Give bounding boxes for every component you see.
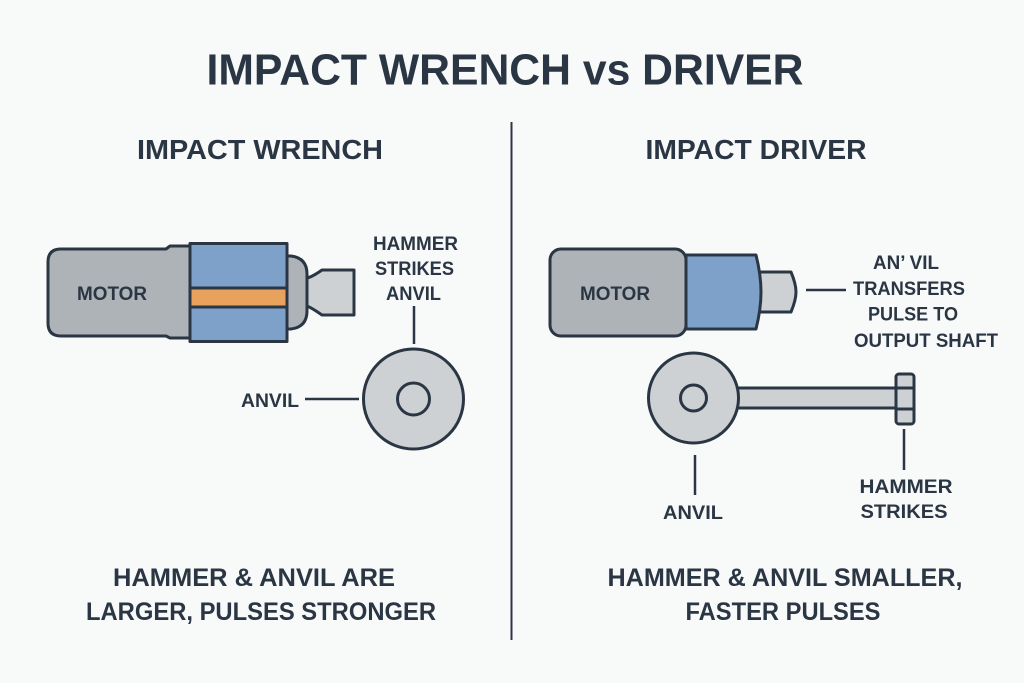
driver label: hammer strikes: HAMMER	[860, 477, 953, 498]
leader line: driver anvil	[806, 289, 846, 291]
wrench motor housing	[48, 246, 190, 338]
driver tool diagram	[550, 249, 796, 336]
wrench anvil disc	[364, 349, 464, 449]
wrench caption	[86, 564, 436, 626]
driver caption	[608, 564, 962, 626]
wrench orange band	[190, 288, 287, 307]
leader line: driver anvil bottom	[694, 455, 696, 495]
shaft nut	[896, 374, 914, 424]
driver motor	[550, 249, 686, 336]
driver motor label: MOTOR	[580, 284, 650, 305]
wrench label: hammer strikes anvil: HAMMER	[373, 234, 458, 255]
title: IMPACT WRENCH vs DRIVER	[206, 46, 804, 94]
wrench motor label: MOTOR	[77, 284, 147, 305]
driver label: anvil transfers pulse: TRANSFERS	[853, 279, 965, 300]
wrench label: hammer strikes anvil: STRIKES	[375, 259, 454, 280]
heading: impact wrench: IMPACT WRENCH	[137, 134, 383, 165]
wrench tip	[307, 270, 354, 315]
driver label: anvil transfers pulse: PULSE TO	[868, 304, 958, 326]
wrench anvil label: ANVIL	[241, 391, 299, 412]
wrench hammer block	[190, 244, 287, 342]
driver blue body	[686, 255, 761, 329]
driver shaft and anvil	[648, 353, 914, 443]
driver caption: FASTER PULSES	[686, 598, 880, 626]
driver label: anvil transfers pulse	[853, 253, 998, 352]
shaft	[735, 388, 899, 408]
driver anvil disc	[648, 353, 738, 443]
driver tip	[759, 272, 796, 312]
driver label: anvil transfers pulse: AN’ VIL	[873, 253, 939, 274]
center divider	[510, 122, 512, 640]
driver label: hammer strikes	[860, 477, 953, 523]
wrench label: hammer strikes anvil: ANVIL	[386, 284, 441, 305]
wrench tool diagram	[48, 244, 354, 342]
heading: impact driver: IMPACT DRIVER	[646, 134, 866, 165]
driver label: anvil transfers pulse: OUTPUT SHAFT	[854, 331, 998, 352]
wrench caption: HAMMER & ANVIL ARE	[113, 564, 395, 592]
driver anvil label: ANVIL	[663, 503, 723, 524]
leader line: anvil	[305, 398, 359, 400]
driver caption: HAMMER & ANVIL SMALLER,	[608, 564, 962, 592]
leader line: hammer strikes	[903, 429, 905, 470]
wrench caption: LARGER, PULSES STRONGER	[86, 598, 436, 626]
driver label: hammer strikes: STRIKES	[860, 502, 948, 523]
wrench label: hammer strikes anvil	[373, 234, 458, 305]
wrench nose	[287, 256, 307, 329]
leader line: hammer	[413, 306, 415, 344]
